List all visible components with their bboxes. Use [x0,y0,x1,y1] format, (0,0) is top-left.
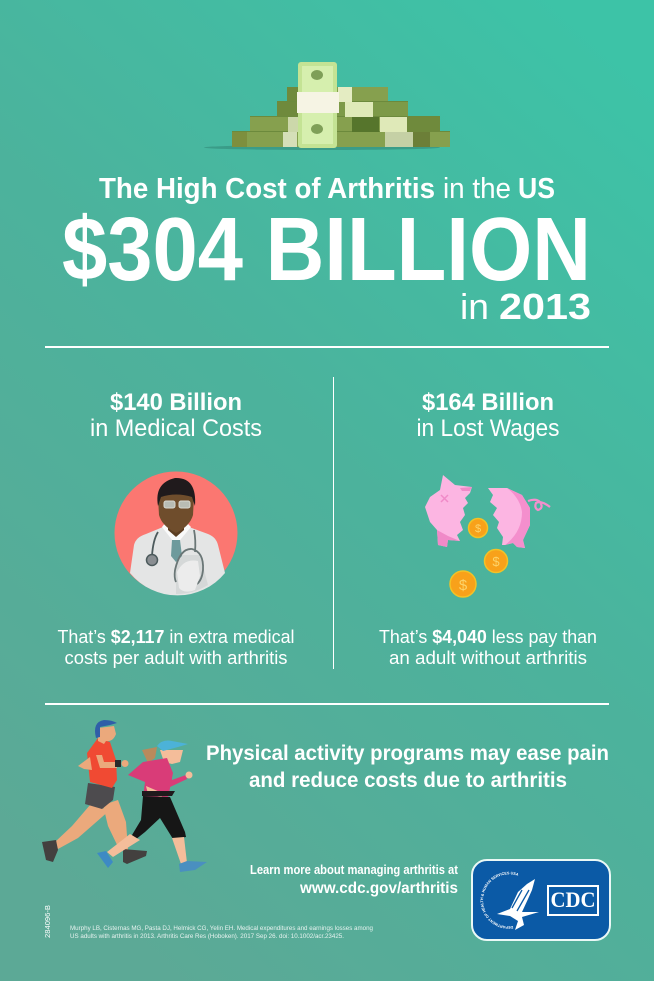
text: medical cost per adult: costs per adult with arthritis [64,647,288,668]
text: citation: Murphy LB, Cisternas MG, Pasta DJ, Helmick CG, Yelin EH. Medical expenditures and earnings losses among [70,925,373,932]
title country: US [518,173,555,205]
text: learn more [250,863,459,897]
heading: wages amount: $164 Billion [422,389,554,416]
callout: physical activity message: and reduce costs due to arthritis [249,769,567,792]
text: citation [70,925,373,940]
icon: broken piggy bank: $ [475,523,481,535]
text: lost pay: That’s $4,040 less pay than [379,626,597,647]
icon: stack of money [204,62,450,150]
text: lost pay [379,626,597,668]
text: medical cost per adult [58,626,294,668]
icon: broken piggy bank [425,475,550,597]
panel: medical costs [58,389,294,668]
callout: physical activity message [206,742,609,792]
heading: wages label: in Lost Wages [416,415,560,442]
callout: physical activity message: Physical activity programs may ease pain [206,742,609,765]
headline year prefix: in [460,286,489,327]
icon: broken piggy bank: $ [492,554,500,569]
headline amount: $304 BILLION [62,200,591,300]
title continuation: in the [443,173,511,205]
icon: two runners [42,720,207,872]
heading: medical amount: $140 Billion [110,389,242,416]
logo: HHS and CDC: CDC [550,887,596,912]
text: learn more: www.cdc.gov/arthritis [299,880,458,897]
logo: HHS and CDC: DEPARTMENT OF HEALTH & HUMAN SERVICES USA [480,872,518,929]
text: citation: US adults with arthritis in 2013. Arthritis Care Res (Hoboken). 2017 Sep 26. doi: 10.1002/acr.23425. [70,933,344,940]
heading: medical label: in Medical Costs [90,415,262,442]
text: learn more: Learn more about managing arthritis at [250,863,459,877]
text: lost pay: an adult without arthritis [389,647,587,668]
icon: doctor [114,472,238,595]
title: The High Cost of Arthritis [99,173,435,205]
headline year: 2013 [499,286,591,327]
panel: lost wages [379,389,597,668]
logo: HHS and CDC [471,859,611,941]
text: publication id: 284096-B [45,905,52,938]
icon: broken piggy bank: $ [459,577,468,594]
text: medical cost per adult: That’s $2,117 in extra medical [58,626,294,647]
